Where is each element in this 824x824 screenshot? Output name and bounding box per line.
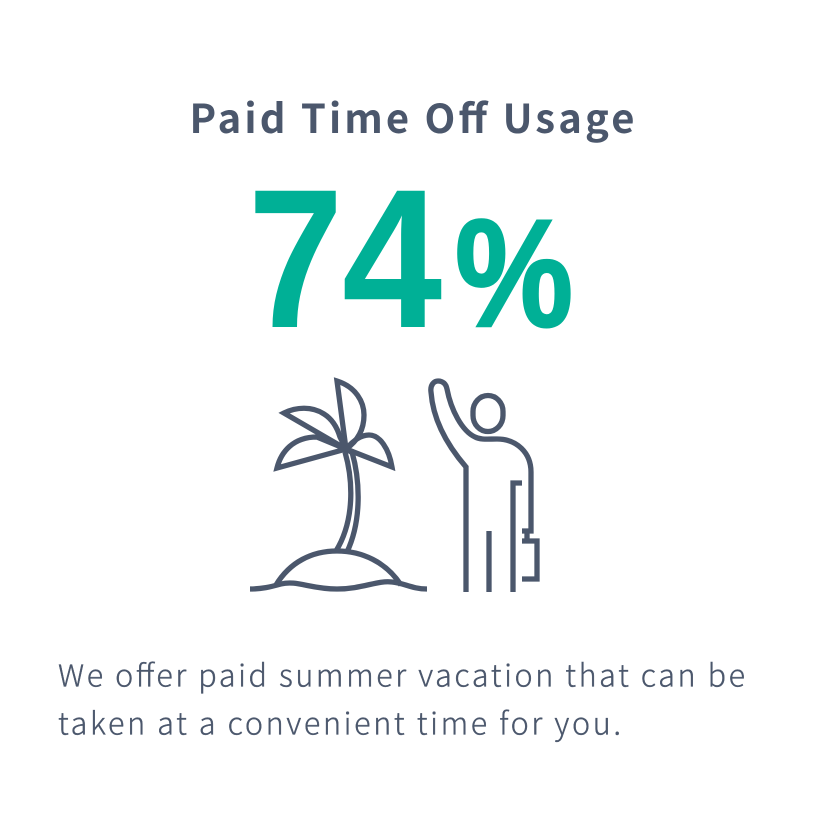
body text: taken at a convenient time for you. bbox=[58, 700, 621, 744]
icon: palm tree island bbox=[250, 381, 427, 589]
title: Paid Time Off Usage bbox=[190, 87, 634, 145]
body text: We offer paid summer vacation that can be bbox=[58, 652, 745, 696]
big statistic: 74%: 7 bbox=[248, 148, 343, 370]
big statistic: 74% bbox=[248, 148, 573, 370]
big statistic: 74%: % bbox=[455, 188, 573, 359]
big statistic: 74%: 4 bbox=[342, 149, 442, 370]
body text bbox=[58, 652, 745, 744]
icon: person waving bbox=[431, 381, 537, 592]
